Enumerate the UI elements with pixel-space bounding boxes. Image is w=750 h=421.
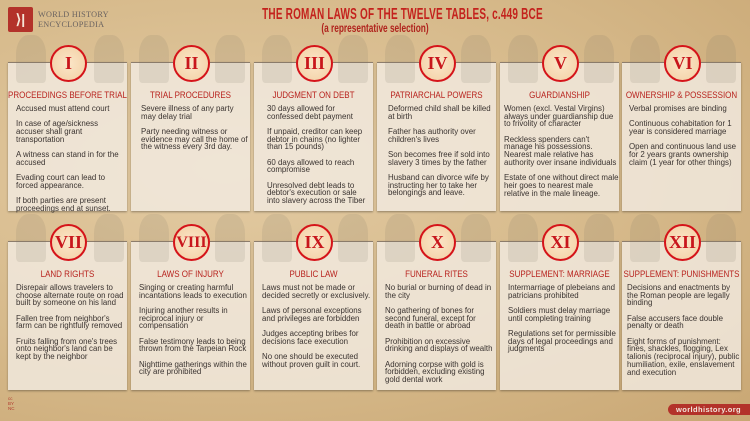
text: Husband can divorce wife by instructing her to take her belongings and leave. <box>388 173 489 197</box>
text <box>385 283 492 384</box>
text: Intermarriage of plebeians and patricians prohibited <box>508 283 615 300</box>
heading: LAWS OF INJURY <box>157 269 224 279</box>
text <box>388 104 491 197</box>
numeral II <box>173 45 210 82</box>
panel: XII <box>622 241 741 390</box>
text <box>504 104 618 198</box>
text <box>267 104 366 205</box>
license mark: cc <box>8 396 12 401</box>
text: False testimony leads to being thrown from the Tarpeian Rock <box>139 337 246 353</box>
text: In case of age/sickness accuser shall grant transportation <box>16 119 98 144</box>
panel: IV <box>377 62 496 211</box>
text: 30 days allowed for confessed debt payment <box>267 104 353 121</box>
text: Unresolved debt leads to debtor's execution or sale into slavery across the Tiber <box>267 181 365 205</box>
numeral I: I <box>65 53 72 73</box>
footer url badge: worldhistory.org <box>676 405 741 414</box>
numeral IV <box>419 45 456 82</box>
text: Singing or creating harmful incantations leads to execution <box>139 283 247 300</box>
text: Soldiers must delay marriage until completing training <box>508 306 610 323</box>
heading: PROCEEDINGS BEFORE TRIAL <box>8 90 127 100</box>
logo <box>8 7 109 32</box>
text: If both parties are present proceedings end at sunset. <box>16 196 111 213</box>
text: Decisions and enactments by the Roman people are legally binding <box>627 283 730 307</box>
heading: SUPPLEMENT: PUNISHMENTS <box>624 269 739 279</box>
heading: TRIAL PROCEDURES <box>150 90 231 100</box>
text: Son becomes free if sold into slavery 3 times by the father <box>388 150 490 167</box>
text <box>508 283 616 353</box>
title: THE ROMAN LAWS OF THE TWELVE TABLES, c.449 BCE <box>262 6 543 23</box>
text: Prohibition on excessive drinking and displays of wealth <box>385 337 492 353</box>
text: Eight forms of punishment: fines, shackles, flogging, Lex talionis (reciprocal injury), public humiliation, exile, enslavement and execution <box>627 337 739 377</box>
text: 60 days allowed to reach compromise <box>267 158 354 174</box>
numeral VIII: VIII <box>176 234 207 251</box>
text: No burial or burning of dead in the city <box>385 283 491 300</box>
text: Laws must not be made or decided secretly or exclusively. <box>262 283 370 300</box>
numeral VI: VI <box>672 53 692 73</box>
numeral VII <box>50 224 87 261</box>
text: Severe illness of any party may delay trial <box>141 104 234 121</box>
title <box>262 6 543 35</box>
heading: JUDGMENT ON DEBT <box>272 90 354 100</box>
numeral XII <box>664 224 701 261</box>
text: If unpaid, creditor can keep debtor in chains (no lighter than 15 pounds) <box>267 127 362 151</box>
license mark: NC <box>8 406 14 411</box>
heading: LAND RIGHTS <box>41 269 94 279</box>
text: Laws of personal exceptions and privileges are forbidden <box>262 306 362 323</box>
text: Verbal promises are binding <box>629 104 727 113</box>
heading: GUARDIANSHIP <box>529 90 590 100</box>
text: Regulations set for permissible days of legal proceedings and judgments <box>508 329 616 353</box>
numeral IX: IX <box>304 232 324 252</box>
text: Nighttime gatherings within the city are prohibited <box>139 360 247 376</box>
text: Continuous cohabitation for 1 year is considered marriage <box>629 119 732 136</box>
text: Accused must attend court <box>16 104 109 113</box>
logo text: ENCYCLOPEDIA <box>38 20 104 28</box>
text <box>16 283 123 361</box>
heading: PATRIARCHAL POWERS <box>390 90 483 100</box>
numeral VII: VII <box>55 232 82 252</box>
text: Party needing witness or evidence may call the home of the witness every 3rd day. <box>141 127 248 151</box>
numeral II: II <box>184 53 198 73</box>
heading: FUNERAL RITES <box>405 269 468 279</box>
numeral III <box>296 45 333 82</box>
text: Adorning corpse with gold is forbidden, excluding existing gold dental work <box>385 360 485 384</box>
panel: I <box>8 62 127 211</box>
text: Fallen tree from neighbor's farm can be rightfully removed <box>16 314 122 330</box>
text: Fruits falling from one's trees onto neighbor's land can be kept by the neighbor <box>16 337 117 361</box>
panel: VIII <box>131 241 250 390</box>
logo text: WORLD HISTORY <box>38 10 109 19</box>
license mark <box>8 396 14 411</box>
text: False accusers face double penalty or death <box>627 314 723 330</box>
numeral XI <box>542 224 579 261</box>
text: Injuring another results in reciprocal injury or compensation <box>139 306 228 330</box>
footer url badge <box>668 404 750 415</box>
icon: logo mark <box>8 7 33 32</box>
numeral VIII <box>173 224 210 261</box>
panel: X <box>377 241 496 390</box>
heading: SUPPLEMENT: MARRIAGE <box>509 269 610 279</box>
text: Father has authority over children's lives <box>388 127 476 144</box>
text <box>629 104 736 167</box>
icon: logo mark: ⟩| <box>16 11 25 27</box>
panel: XI <box>500 241 619 390</box>
text: Deformed child shall be killed at birth <box>388 104 491 121</box>
heading: PUBLIC LAW <box>289 269 338 279</box>
numeral X <box>419 224 456 261</box>
text: No gathering of bones for second funeral, except for death in battle or abroad <box>385 306 476 330</box>
panel: VII <box>8 241 127 390</box>
text: Estate of one without direct male heir goes to nearest male relative in the male lineage. <box>504 173 618 198</box>
text: Open and continuous land use for 2 years grants ownership claim (1 year for other things) <box>629 142 736 167</box>
numeral XI: XI <box>550 232 570 252</box>
text: No one should be executed without proven guilt in court. <box>262 352 360 369</box>
text: Evading court can lead to forced appearance. <box>16 173 105 190</box>
panel: II <box>131 62 250 211</box>
text <box>139 283 247 376</box>
numeral VI <box>664 45 701 82</box>
panel: V <box>500 62 619 211</box>
panel: VI <box>622 62 741 211</box>
text: Disrepair allows travelers to choose alternate route on road built by someone on his land <box>16 283 123 307</box>
numeral V: V <box>554 53 567 73</box>
text: Reckless spenders can't manage his possessions. Nearest male relative has authority over insane individuals <box>504 135 616 167</box>
numeral IV: IV <box>427 53 448 73</box>
numeral IX <box>296 224 333 261</box>
heading: OWNERSHIP & POSSESSION <box>626 90 737 100</box>
numeral XII: XII <box>669 232 696 252</box>
text: A witness can stand in for the accused <box>16 150 119 167</box>
logo text <box>38 10 109 28</box>
subtitle: (a representative selection) <box>321 23 429 35</box>
text <box>16 104 119 213</box>
text <box>141 104 248 151</box>
text: Women (excl. Vestal Virgins) always under guardianship due to frivolity of character <box>504 104 613 128</box>
numeral X: X <box>431 232 444 252</box>
text <box>262 283 370 369</box>
text <box>627 283 740 377</box>
panel: IX <box>254 241 373 390</box>
numeral III: III <box>304 53 325 73</box>
panel: III <box>254 62 373 211</box>
text: Judges accepting bribes for decisions face execution <box>262 329 358 346</box>
license mark: BY <box>8 401 14 406</box>
numeral V <box>542 45 579 82</box>
numeral I <box>50 45 87 82</box>
